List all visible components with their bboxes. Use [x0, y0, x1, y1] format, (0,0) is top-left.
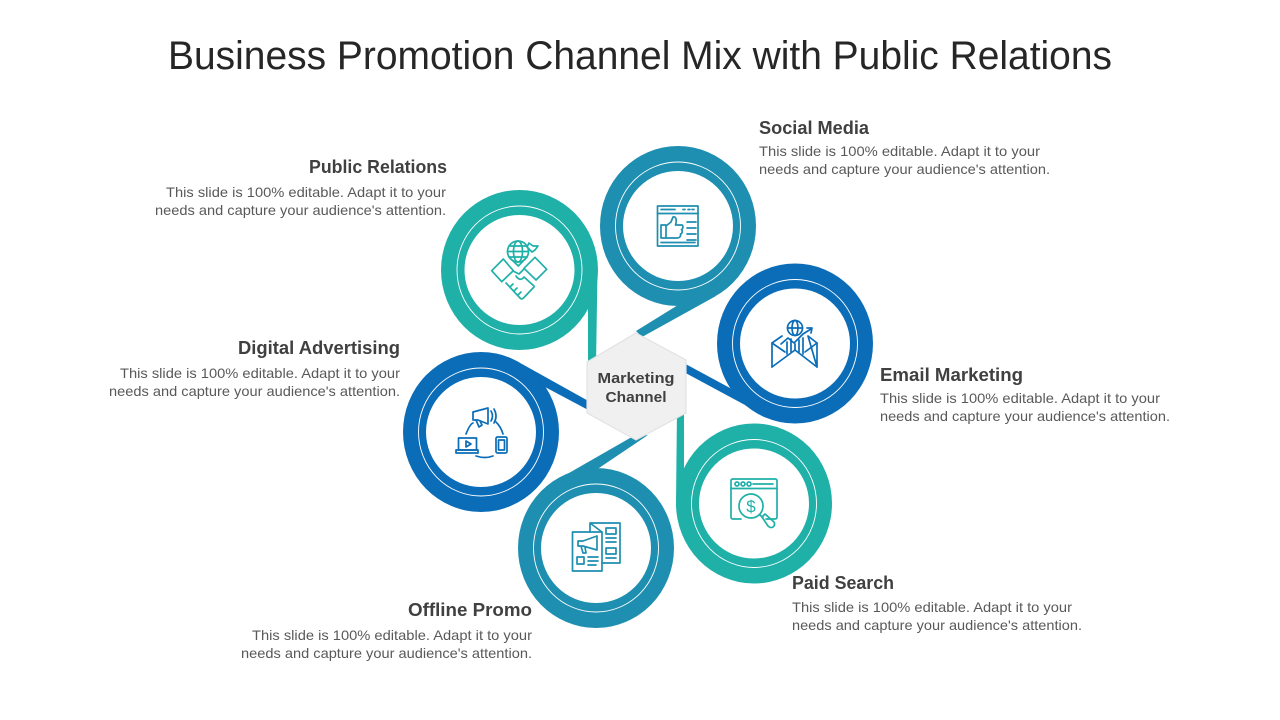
label: social media [759, 118, 1050, 177]
ring: email marketing [680, 264, 873, 424]
icon: envelope with globe and chart [772, 320, 817, 367]
label: paid search: needs and capture your audience's attention. [792, 617, 1082, 633]
label: offline promo: needs and capture your audience's attention. [241, 645, 532, 661]
label: email marketing: needs and capture your audience's attention. [880, 408, 1170, 424]
label: public relations: Public Relations [309, 157, 447, 177]
label: offline promo: Offline Promo [408, 600, 532, 620]
label: email marketing: Email Marketing [880, 365, 1023, 385]
label: digital advertising [109, 338, 400, 399]
diagram: marketing channel rings [403, 146, 873, 628]
ring: public relations [441, 190, 598, 366]
icon: handshake and globe [492, 241, 547, 299]
label: social media: needs and capture your audience's attention. [759, 161, 1050, 177]
icon: thumbs up on web page [658, 206, 698, 246]
label: email marketing: This slide is 100% editable. Adapt it to your [880, 390, 1160, 406]
icon: search with dollar: $ [746, 497, 756, 516]
label: digital advertising: Digital Advertising [238, 338, 400, 358]
label: email marketing [880, 365, 1170, 424]
icon: megaphone, laptop and phone [456, 408, 507, 458]
label: public relations [155, 157, 447, 218]
ring: digital advertising [403, 352, 592, 512]
icon: search with dollar [731, 479, 777, 528]
label: social media: Social Media [759, 118, 870, 138]
center hexagon: Marketing [598, 371, 674, 387]
ring: offline promo [518, 435, 674, 628]
label: offline promo [241, 600, 532, 661]
label: public relations: This slide is 100% editable. Adapt it to your [166, 184, 446, 200]
label: digital advertising: needs and capture your audience's attention. [109, 383, 400, 399]
ring: paid search [676, 408, 832, 584]
title: Business Promotion Channel Mix with Public Relations [168, 34, 1112, 78]
center hexagon: Channel [606, 390, 666, 406]
label: digital advertising: This slide is 100% editable. Adapt it to your [120, 365, 400, 381]
icon: brochure with megaphone [572, 523, 620, 571]
label: public relations: needs and capture your audience's attention. [155, 202, 446, 218]
label: paid search: This slide is 100% editable. Adapt it to your [792, 599, 1072, 615]
center hexagon [587, 333, 686, 440]
label: paid search: Paid Search [792, 573, 894, 593]
label: social media: This slide is 100% editable. Adapt it to your [759, 143, 1040, 159]
label: offline promo: This slide is 100% editable. Adapt it to your [252, 627, 532, 643]
label: paid search [792, 573, 1082, 633]
ring: social media [600, 146, 756, 337]
